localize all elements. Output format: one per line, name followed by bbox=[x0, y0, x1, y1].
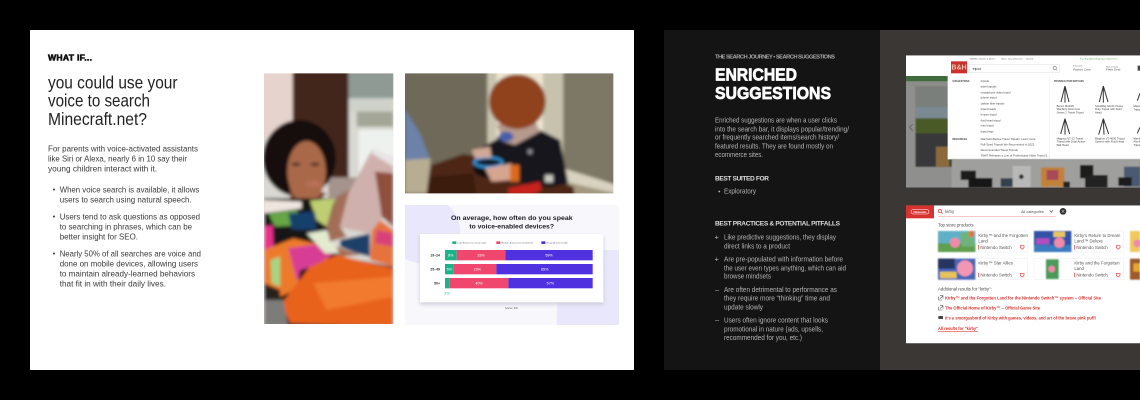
site header: Free Expedited Shipping on Most Items bbox=[1080, 57, 1118, 60]
product cards: Kirby and the Forgotten bbox=[1074, 261, 1120, 266]
site header: B&H bbox=[951, 65, 967, 72]
site header: Rent or Lease bbox=[1106, 65, 1119, 68]
additional results: It's a smorgasbord of Kirby with games, videos, and art of the brave pink puff! bbox=[945, 316, 1096, 321]
description: or frequently searched items/search history/ bbox=[715, 133, 840, 142]
bullet list: done on mobile devices, allowing users bbox=[60, 258, 198, 268]
intro paragraph: young children interact with it. bbox=[48, 164, 157, 174]
suggestion dropdown: MachFly Aluminum bbox=[1057, 107, 1081, 111]
suggestion dropdown: tripod heads bbox=[981, 107, 997, 111]
product cards: Nintendo Switch bbox=[980, 272, 1012, 277]
screenshot: B&H search suggestions bbox=[906, 55, 1140, 188]
best practices and pitfalls: Users often ignore content that looks bbox=[724, 316, 828, 325]
product cards: Land™ Deluxe bbox=[1074, 238, 1104, 243]
additional results bbox=[938, 295, 1101, 332]
suggestion dropdown: iphone tripod bbox=[981, 96, 997, 100]
best practices and pitfalls: direct links to a product bbox=[724, 241, 790, 250]
legend: Medium: At least a few times/month bbox=[502, 242, 533, 245]
chart title: to voice-enabled devices? bbox=[469, 224, 554, 231]
product cards: Land bbox=[978, 238, 989, 243]
bullet list: users to search using natural speech. bbox=[60, 194, 192, 204]
best practices and pitfalls bbox=[714, 221, 846, 342]
site header: Payboo Card bbox=[1073, 68, 1091, 72]
intro paragraph: like Siri or Alexa, nearly 6 in 10 say their bbox=[48, 154, 187, 164]
suggestion dropdown: Recommended Travel Tripods bbox=[981, 148, 1018, 152]
best practices and pitfalls: browse mindsets bbox=[724, 272, 771, 281]
suggestion dropdown: POSSIBLE ITEM MATCHES bbox=[1054, 80, 1084, 83]
bullet list bbox=[53, 184, 201, 288]
heading: voice search question: voice to search bbox=[48, 91, 150, 111]
heading: voice search question: Minecraft.net? bbox=[48, 109, 147, 129]
chart source: Source: Poll bbox=[505, 307, 518, 310]
heading: voice search question: you could use your bbox=[48, 72, 178, 92]
intro paragraph: For parents with voice-activated assistants bbox=[48, 144, 198, 154]
site header: Need It bbox=[1026, 57, 1034, 60]
product cards bbox=[938, 231, 1140, 280]
description: Enriched suggestions are when a user clicks bbox=[715, 116, 837, 125]
stacked bars: 25–49 bbox=[430, 268, 440, 272]
suggestion dropdown: smartphone video tripod bbox=[981, 90, 1011, 94]
stacked bars: 50+ bbox=[434, 282, 440, 286]
best practices and pitfalls: Are often detrimental to performance as bbox=[724, 285, 837, 294]
product cards: Land bbox=[1074, 266, 1085, 271]
bullet list: Users tend to ask questions as opposed bbox=[60, 211, 200, 221]
camera gear strip bbox=[952, 159, 1140, 188]
search bar: All categories bbox=[1021, 210, 1044, 214]
suggestion dropdown: SWAT Releases a Line of Professional Video Tripod S... bbox=[981, 153, 1050, 157]
site header: Free Cash bbox=[1073, 65, 1082, 68]
description: ecommerce sites. bbox=[715, 150, 763, 159]
bullet list: better insight for SEO. bbox=[60, 231, 138, 241]
suggestion dropdown: Duty Tripod with Fluid bbox=[1095, 107, 1122, 111]
suggestion dropdown: Magnus VT-4000 Tripod bbox=[1095, 136, 1125, 140]
chart title bbox=[451, 216, 573, 228]
search bar: kirby bbox=[945, 209, 955, 214]
stacked bars: 2% bbox=[444, 292, 450, 296]
heading: voice search question bbox=[48, 72, 178, 129]
bullet list: Nearly 50% of all searches are voice and bbox=[60, 248, 201, 258]
title bbox=[715, 65, 831, 103]
best practices and pitfalls: – bbox=[715, 316, 720, 325]
suggestion dropdown: travel tripods bbox=[981, 84, 997, 88]
suggestion dropdown: tripods bbox=[981, 79, 990, 83]
product cards: Kirby's Return to Dream bbox=[1074, 233, 1121, 238]
best practices and pitfalls: BEST PRACTICES & POTENTIAL PITFALLS bbox=[715, 221, 841, 228]
stacked bars: 40% bbox=[475, 282, 483, 286]
stacked bars bbox=[430, 250, 593, 296]
stacked bars: 65% bbox=[541, 268, 549, 272]
suggestion dropdown: Manfrotto Befree Travel Tripods: Learn more bbox=[981, 137, 1036, 141]
chart card bbox=[420, 234, 603, 302]
suggestion dropdown: Magnus VT-12 Travel bbox=[1057, 136, 1083, 140]
site header: tripod bbox=[973, 67, 981, 71]
bullet list: When voice search is available, it allows bbox=[60, 184, 199, 194]
suggestion dropdown: carbon fiber tripods bbox=[981, 101, 1005, 105]
best practices and pitfalls: Are pre-populated with information before bbox=[724, 255, 843, 264]
suggestion dropdown: RESOURCES bbox=[952, 139, 968, 141]
panel: enriched suggestions text column bbox=[664, 30, 880, 370]
suggestion dropdown: SmallRig AD-01 Heavy bbox=[1095, 104, 1124, 108]
suggestion dropdown: Benro MAF05 bbox=[1057, 104, 1074, 108]
suggestion dropdown: fluid head tripod bbox=[981, 118, 1001, 122]
description: into the search bar, it displays popular/trending/ bbox=[715, 124, 850, 133]
breadcrumb: THE SEARCH JOURNEY • SEARCH SUGGESTIONS bbox=[715, 55, 835, 61]
site header: USA (En, Dealers & More) · bbox=[969, 57, 996, 60]
panel: screenshot backdrop bbox=[880, 30, 1140, 370]
best practices and pitfalls: – bbox=[715, 285, 720, 294]
photo: child with smart speaker bbox=[405, 73, 614, 194]
intro paragraph bbox=[48, 144, 198, 174]
chart panel: how often do you speak to voice-enabled devices bbox=[405, 205, 619, 325]
legend: Heavy: At least monthly bbox=[547, 242, 567, 245]
eyebrow: what if: WHAT IF... bbox=[48, 52, 92, 62]
product cards: Nintendo Switch bbox=[980, 245, 1012, 250]
screenshot: Nintendo search suggestions: Top store products bbox=[938, 222, 974, 227]
suggestion dropdown bbox=[948, 76, 1140, 159]
stacked bars: 19–24 bbox=[430, 254, 440, 258]
stacked bars: 57% bbox=[547, 282, 555, 286]
stacked bars: 8% bbox=[448, 254, 454, 258]
product cards: Nintendo Switch bbox=[1076, 272, 1108, 277]
legend bbox=[452, 241, 567, 245]
suggestion dropdown: Tripod with Dual-Action bbox=[1057, 140, 1086, 144]
bullet list: to maintain already-learned behaviors bbox=[60, 268, 195, 278]
suggestion dropdown: Full-Sized Tripods We Recommend in 2022 bbox=[981, 142, 1035, 146]
suggestion dropdown: Head bbox=[1095, 111, 1102, 115]
best practices and pitfalls: Like predictive suggestions, they display bbox=[724, 233, 836, 242]
additional results: All results for "kirby" bbox=[938, 326, 978, 331]
tripod products bbox=[1061, 86, 1140, 135]
stacked bars: 29% bbox=[474, 268, 482, 272]
best suited for: Exploratory bbox=[724, 187, 756, 196]
site header: News, Tips & Reviews bbox=[1001, 58, 1023, 60]
product cards: Kirby™ and the Forgotten bbox=[978, 233, 1028, 238]
additional results: The Official Home of Kirby™ – Official Game Site bbox=[945, 305, 1040, 310]
stacked bars: 59% bbox=[545, 254, 553, 258]
screenshot: Nintendo search suggestions bbox=[906, 205, 1140, 343]
suggestion dropdown: System with Fluid Head bbox=[1095, 140, 1125, 144]
best practices and pitfalls: + bbox=[714, 255, 719, 264]
legend: Light: At least once every couple bbox=[458, 242, 487, 245]
search bar bbox=[938, 208, 1066, 216]
suggestion dropdown: tripod legs bbox=[981, 129, 994, 133]
product cards: Kirby™ Star Allies bbox=[978, 261, 1013, 266]
description bbox=[715, 116, 850, 159]
suggestion dropdown: SUGGESTIONS bbox=[952, 81, 970, 83]
title: SUGGESTIONS bbox=[715, 83, 831, 103]
best practices and pitfalls: update slowly bbox=[724, 302, 763, 311]
suggestion dropdown: Ball Head bbox=[1057, 143, 1069, 147]
hero image bbox=[916, 87, 952, 167]
title: ENRICHED bbox=[715, 65, 797, 85]
panel: what if slide bbox=[30, 30, 634, 370]
nintendo logo bbox=[906, 205, 934, 218]
best practices and pitfalls: recommended for you, etc.) bbox=[724, 333, 802, 342]
chart title: On average, how often do you speak bbox=[451, 215, 573, 222]
additional results: Kirby™ and the Forgotten Land for the Nintendo Switch™ system – Official Site bbox=[945, 295, 1101, 300]
suggestion dropdown: mini tripod bbox=[981, 124, 994, 128]
best suited for bbox=[715, 175, 769, 196]
description: featured results. They are found mostly on bbox=[715, 141, 833, 150]
best practices and pitfalls: promotional in nature (ads, upsells, bbox=[724, 324, 823, 333]
stacked bars: 6% bbox=[447, 268, 453, 272]
best practices and pitfalls: + bbox=[714, 233, 719, 242]
bullet list: that fit in with their daily lives. bbox=[60, 278, 166, 288]
screenshot: Nintendo search suggestions: Additional results for "kirby": bbox=[938, 286, 992, 291]
nintendo logo: Nintendo bbox=[914, 210, 927, 214]
best practices and pitfalls: the user even types anything, which can aid bbox=[724, 263, 846, 272]
best suited for: BEST SUITED FOR bbox=[715, 175, 769, 182]
photo: woman using tablet bbox=[260, 70, 397, 330]
site header bbox=[951, 57, 1140, 73]
best practices and pitfalls: they require more “thinking” time and bbox=[724, 294, 830, 303]
stacked bars: 33% bbox=[477, 254, 485, 258]
suggestion dropdown: Series 1 Travel Tripod bbox=[1057, 111, 1084, 115]
suggestion dropdown: lenovo tripod bbox=[981, 112, 997, 116]
product cards: Nintendo Switch bbox=[1076, 245, 1108, 250]
bullet list: to searching in phrases, which can be bbox=[60, 221, 192, 231]
site header: Flash Deal bbox=[1106, 68, 1121, 72]
